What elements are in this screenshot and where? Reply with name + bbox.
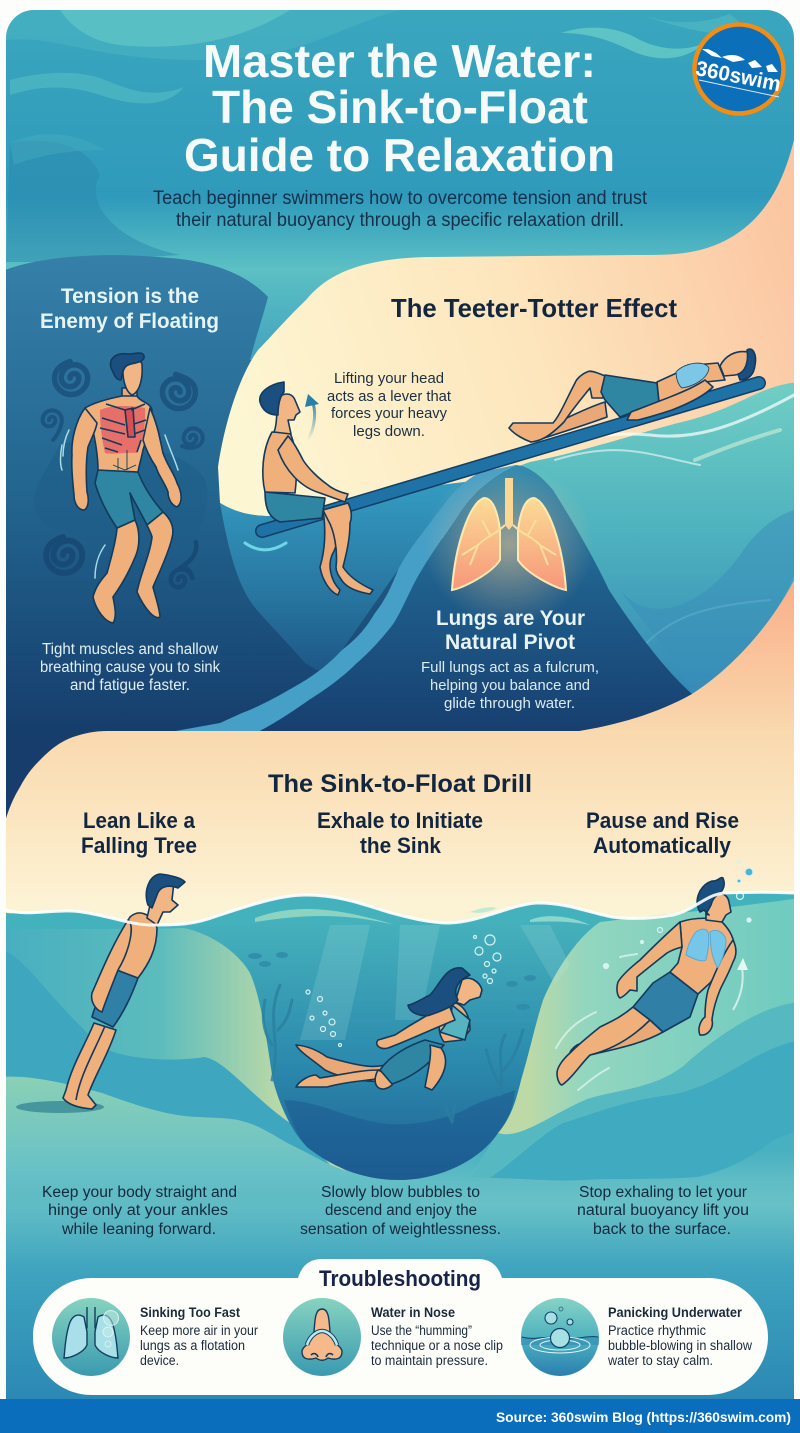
text: sinking too fast: Keep more air in your <box>140 1323 258 1338</box>
figure: lying man <box>509 349 756 442</box>
step headings: Falling Tree <box>81 833 197 858</box>
fish <box>248 952 536 1010</box>
panel: troubleshooting <box>33 1259 768 1395</box>
callout: lever: forces your heavy <box>331 405 447 422</box>
subtitle: their natural buoyancy through a specific relaxation drill. <box>176 210 624 231</box>
callout: lever: Lifting your head <box>334 370 444 387</box>
right swell lower layers <box>470 1002 800 1180</box>
water under seated figure <box>220 480 480 672</box>
figure: swimmer woman <box>296 968 482 1090</box>
step headings: Lean Like a <box>83 808 196 833</box>
title <box>186 44 612 172</box>
underwater scene <box>0 892 800 1400</box>
heading: tension: Enemy of Floating <box>40 310 219 333</box>
icon: nose <box>283 1298 361 1376</box>
heading: drill: The Sink-to-Float Drill <box>268 770 532 798</box>
text: water in nose: Use the “humming” <box>371 1323 472 1338</box>
teeter-totter board <box>245 383 759 550</box>
heading: tension: Tension is the <box>61 285 199 308</box>
text: panicking underwater: bubble-blowing in shallow <box>608 1338 752 1353</box>
text: water in nose: technique or a nose clip <box>371 1338 503 1353</box>
step 3 text <box>577 1184 749 1238</box>
text: panicking underwater <box>607 1305 752 1368</box>
icon: lungs <box>52 1298 130 1376</box>
tension text <box>40 641 220 694</box>
troubleshooting pill <box>33 1259 768 1395</box>
right swell <box>470 898 800 1180</box>
title: Guide to Relaxation <box>184 129 615 181</box>
callout: lever: legs down. <box>353 423 425 440</box>
figure: seated man <box>260 382 373 595</box>
panel: tension <box>34 285 220 694</box>
right water <box>476 382 794 713</box>
lungs text: helping you balance and <box>430 677 590 694</box>
logo: 360swim: 360swim <box>694 57 783 96</box>
step headings <box>81 808 739 858</box>
lower drill section cream <box>6 731 794 924</box>
bubbles <box>306 860 753 1046</box>
text: water in nose <box>371 1305 503 1368</box>
tension text: and fatigue faster. <box>70 677 190 694</box>
step 1 text <box>42 1184 237 1238</box>
step 2 text: Slowly blow bubbles to <box>321 1184 480 1201</box>
text: panicking underwater: Panicking Underwater <box>608 1305 743 1320</box>
source text: Source: 360swim Blog (https://360swim.com) <box>496 1410 791 1425</box>
step 2 text: descend and enjoy the <box>325 1202 477 1219</box>
step headings: Exhale to Initiate <box>317 808 483 833</box>
step 1 text: while leaning forward. <box>61 1221 216 1238</box>
callout: lever <box>327 370 452 440</box>
title: The Sink-to-Float <box>212 81 588 133</box>
text: sinking too fast: device. <box>140 1353 179 1368</box>
step headings: Pause and Rise <box>586 808 739 833</box>
title: Master the Water: <box>203 35 596 87</box>
water sheen marks <box>470 907 590 925</box>
figure: rising man <box>557 878 736 1085</box>
peach upper background <box>218 140 800 516</box>
tension text: Tight muscles and shallow <box>42 641 219 658</box>
step 3 text: Stop exhaling to let your <box>579 1184 747 1201</box>
text: sinking too fast: lungs as a flotation <box>140 1338 245 1353</box>
surface tint <box>255 909 395 925</box>
troubleshooting heading: Troubleshooting <box>319 1266 481 1291</box>
peach lower right <box>579 580 794 731</box>
step 2 text: sensation of weightlessness. <box>300 1221 501 1238</box>
text: panicking underwater: Practice rhythmic <box>608 1323 706 1338</box>
tension swirls <box>34 362 207 587</box>
subtitle: Teach beginner swimmers how to overcome tension and trust <box>153 188 648 209</box>
icon: bubbles <box>521 1298 599 1376</box>
text: sinking too fast: Sinking Too Fast <box>140 1305 240 1320</box>
sea body <box>0 892 800 1400</box>
heading: teeter-totter: The Teeter-Totter Effect <box>391 293 677 323</box>
subtitle <box>153 188 648 231</box>
water highlights right <box>554 393 794 694</box>
figure: tense man <box>72 353 181 623</box>
light stripe beside lung hill <box>170 465 516 732</box>
arrow: rising <box>733 958 748 1010</box>
footer bar <box>0 1399 800 1433</box>
step 1 text: hinge only at your ankles <box>48 1202 228 1219</box>
seaweed <box>263 985 523 1122</box>
step 2 text <box>300 1184 501 1238</box>
text: sinking too fast <box>140 1305 258 1368</box>
step 3 text: back to the surface. <box>593 1221 731 1238</box>
lungs text: Full lungs act as a fulcrum, <box>421 659 599 676</box>
lung pivot hill <box>258 465 692 732</box>
figure: leaning man <box>16 874 185 1113</box>
header background <box>6 10 794 360</box>
step headings: the Sink <box>360 833 442 858</box>
step 3 text: natural buoyancy lift you <box>577 1202 749 1219</box>
icon: glowing lungs <box>431 471 588 620</box>
tension text: breathing cause you to sink <box>40 659 220 676</box>
motion lines <box>556 954 637 1090</box>
text: water in nose: Water in Nose <box>371 1305 455 1320</box>
step headings: Automatically <box>593 833 732 858</box>
water line <box>6 892 794 925</box>
arrow: up <box>305 394 319 440</box>
logo: 360swim <box>694 24 784 114</box>
seabed mound <box>284 1090 515 1180</box>
step 1 text: Keep your body straight and <box>42 1184 237 1201</box>
text: panicking underwater: water to stay calm. <box>607 1353 713 1368</box>
left sand hill <box>6 1076 418 1206</box>
text: water in nose: to maintain pressure. <box>371 1353 488 1368</box>
lungs text <box>421 659 599 712</box>
heading: tension <box>40 285 219 333</box>
lungs text: glide through water. <box>444 695 575 712</box>
left dark panel background <box>6 255 442 818</box>
left swell <box>30 928 347 1172</box>
heading: lungs <box>437 610 585 649</box>
light rays <box>300 925 570 1040</box>
heading: lungs: Lungs are Your <box>436 607 585 630</box>
heading: lungs: Natural Pivot <box>445 631 575 654</box>
central trench <box>228 922 600 1180</box>
callout: lever: acts as a lever that <box>327 388 452 405</box>
